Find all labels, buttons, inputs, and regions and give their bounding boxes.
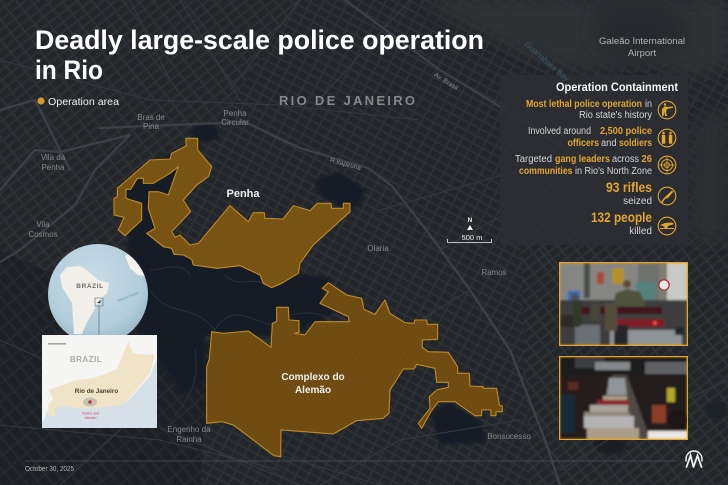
logo: AA	[686, 451, 702, 467]
map place labels	[28, 109, 531, 444]
map place labels: Rainha	[176, 435, 202, 444]
map place labels: Bras de	[137, 113, 165, 122]
panel text: personnel: officers	[568, 138, 599, 149]
right info panel background	[500, 75, 688, 245]
road labels: Av. Brasil	[433, 71, 459, 92]
locator globe	[48, 244, 148, 344]
panel text: targets	[515, 154, 652, 177]
panel text: rifles seized: 93 rifles	[606, 179, 652, 195]
icon: rifle	[658, 187, 676, 205]
inset map: Rio de Janeiro state	[42, 335, 157, 428]
panel text: people killed: 132 people	[591, 209, 652, 225]
panel text: personnel: Involved around	[528, 126, 591, 137]
icon: two soldiers	[658, 129, 676, 147]
legend: operation area: Operation area	[48, 96, 119, 108]
panel text: most lethal	[526, 99, 652, 121]
city label: RIO DE JANEIRO	[279, 93, 415, 108]
map place labels: Circular	[221, 118, 249, 127]
panel text: people killed	[591, 209, 652, 237]
footer divider	[25, 460, 677, 462]
panel text: most lethal: Most lethal police operation	[526, 99, 642, 110]
inset map: Rio de Janeiro state: Rio de Janeiro	[75, 388, 118, 395]
map place labels: Engenho da	[167, 425, 211, 434]
area label: Complexo do Alemão: Alemão	[295, 385, 331, 396]
airport label	[599, 36, 685, 59]
road labels	[329, 71, 459, 172]
photo: soldiers on police truck	[559, 262, 688, 346]
panel text: personnel: 2,500 police	[600, 126, 652, 137]
area label: Penha: Penha	[226, 188, 260, 200]
icon: fallen person	[658, 217, 676, 235]
map place labels: Cosmos	[28, 230, 58, 239]
north arrow and scale bar: N	[468, 217, 473, 224]
water bodies	[120, 124, 727, 454]
globe: South America	[60, 266, 109, 334]
locator globe: BRAZIL	[76, 283, 104, 290]
area label: Complexo do Alemão	[281, 372, 345, 396]
panel text: people killed: killed	[629, 226, 652, 237]
title: in Rio	[35, 55, 103, 85]
panel text: rifles seized	[606, 179, 652, 207]
operation area: Penha	[114, 138, 350, 288]
panel text: personnel	[528, 126, 652, 149]
title	[35, 25, 484, 85]
north arrow and scale bar: 500 m	[462, 233, 482, 242]
map place labels: Vila	[36, 220, 50, 229]
operation area: Complexo do Alemão	[207, 283, 502, 457]
map place labels: Vila da	[41, 153, 66, 162]
airport label: Airport	[628, 48, 656, 59]
locator globe: Atlantic Ocean	[117, 291, 140, 303]
map place labels: Penha	[41, 163, 65, 172]
photo: row of covered bodies with crowd	[559, 356, 688, 440]
inset map: Rio de Janeiro state: Alemão	[85, 416, 96, 420]
map place labels: Penha	[223, 109, 247, 118]
panel text: most lethal: Rio state's history	[579, 110, 652, 121]
panel text: personnel: soldiers	[619, 138, 652, 149]
panel heading: Operation Containment	[556, 80, 678, 94]
date: October 30, 2025	[25, 466, 74, 473]
panel text: targets: communities	[519, 166, 573, 177]
map place labels: Pina	[143, 122, 160, 131]
inset map: Rio de Janeiro state: Penha and	[82, 412, 99, 416]
panel text: targets: gang leaders	[555, 154, 610, 165]
panel text: rifles seized: seized	[623, 196, 652, 207]
bay label: Guanabara Bay	[523, 40, 571, 83]
inset map: Rio de Janeiro state: BRAZIL	[70, 355, 102, 364]
map place labels: Olaria	[367, 244, 389, 253]
panel text: most lethal: in	[645, 99, 652, 110]
map place labels: Bonsucesso	[487, 432, 531, 441]
panel text: targets: Targeted	[515, 154, 552, 165]
icon: shooter	[658, 101, 676, 119]
area label: Complexo do Alemão: Complexo do	[281, 372, 345, 383]
title: Deadly large-scale police operation	[35, 25, 484, 55]
north arrow and scale bar	[448, 217, 492, 242]
panel text: targets: in Rio's North Zone	[575, 166, 652, 177]
panel text: personnel: and	[601, 138, 616, 149]
airport label: Galeão International	[599, 36, 685, 47]
panel text: targets: across	[612, 154, 639, 165]
icon: target crosshair	[658, 156, 676, 174]
panel text: targets: 26	[642, 154, 652, 165]
map place labels: Ramos	[481, 268, 507, 277]
road labels: R.Itapiruna	[329, 157, 362, 172]
